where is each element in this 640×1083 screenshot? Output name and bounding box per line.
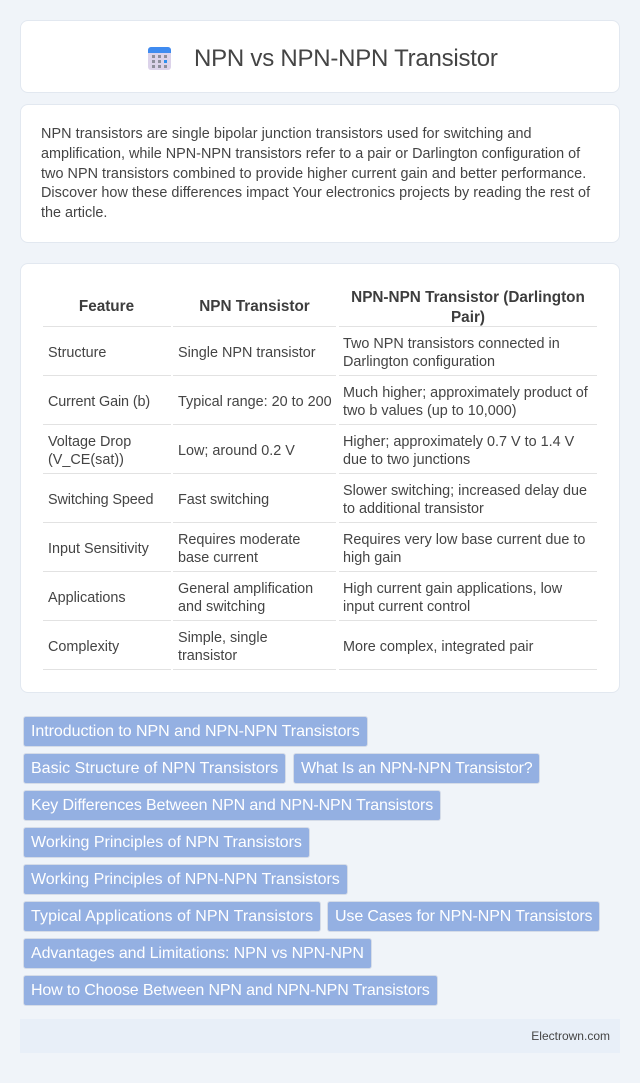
tag: introduction: Introduction to NPN and NPN-NPN Transistors	[31, 723, 360, 740]
text block: introduction: Discover how these differences impact Your electronics projects by reading the rest of	[41, 185, 590, 201]
row: current gain	[48, 385, 588, 419]
row: switching speed: Slower switching; increased delay due	[343, 483, 587, 499]
tag: how to choose	[23, 975, 438, 1006]
row: applications: and switching	[178, 599, 265, 615]
row: input sensitivity: Requires moderate	[178, 532, 300, 548]
text block: introduction: amplification, while NPN-NPN transistors refer to a pair or Darlington configuration of	[41, 146, 580, 162]
row: applications	[48, 581, 562, 615]
row: input sensitivity: Requires very low base current due to	[343, 532, 585, 548]
row: structure: Darlington configuration	[343, 354, 495, 370]
row: input sensitivity	[48, 532, 585, 566]
row: applications: Applications	[48, 590, 126, 606]
tag: key differences: Key Differences Between NPN and NPN-NPN Transistors	[31, 797, 433, 814]
row: structure: Two NPN transistors connected in	[343, 336, 560, 352]
title: NPN vs NPN-NPN Transistor	[194, 45, 498, 72]
row: applications: High current gain applications, low	[343, 581, 562, 597]
row: current gain: Current Gain (b)	[48, 394, 150, 410]
tag: use cases	[327, 901, 600, 932]
text block: introduction: NPN transistors are single bipolar junction transistors used for switching and	[41, 126, 532, 142]
tag: typical applications: Typical Applications of NPN Transistors	[31, 908, 313, 925]
row: switching speed: to additional transistor	[343, 501, 484, 517]
row: voltage drop: Voltage Drop	[48, 434, 131, 450]
tag: working principles NPN: Working Principles of NPN Transistors	[31, 834, 302, 851]
tag: typical applications	[23, 901, 321, 932]
table	[43, 289, 597, 670]
row: switching speed	[48, 483, 587, 517]
tag: advantages: Advantages and Limitations: NPN vs NPN-NPN	[31, 945, 364, 962]
row: current gain: Much higher; approximately product of	[343, 385, 588, 401]
tag: key differences	[23, 790, 441, 821]
row: input sensitivity: base current	[178, 550, 258, 566]
tag: working principles NPN-NPN	[23, 864, 348, 895]
row: structure: Single NPN transistor	[178, 345, 316, 361]
row: voltage drop: (V_CE(sat))	[48, 452, 124, 468]
panel: comparison table	[20, 263, 620, 693]
panel: introduction	[20, 104, 620, 243]
row: current gain: two b values (up to 10,000)	[343, 403, 517, 419]
row: voltage drop	[48, 434, 574, 468]
row: complexity	[48, 630, 534, 664]
row: input sensitivity: high gain	[343, 550, 401, 566]
icon: calendar	[148, 47, 171, 70]
row: structure	[48, 336, 560, 370]
tag: working principles NPN	[23, 827, 310, 858]
text block: introduction: two NPN transistors combined to provide higher current gain and better performance.	[41, 166, 586, 182]
row: complexity: More complex, integrated pair	[343, 639, 533, 655]
row: applications: input current control	[343, 599, 470, 615]
tag: basic structure: Basic Structure of NPN Transistors	[31, 760, 278, 777]
table header: NPN Transistor	[199, 298, 310, 315]
tag: how to choose: How to Choose Between NPN and NPN-NPN Transistors	[31, 982, 430, 999]
row: switching speed: Switching Speed	[48, 492, 153, 508]
tag: introduction	[23, 716, 368, 747]
table header: Feature	[79, 298, 134, 315]
row: voltage drop: due to two junctions	[343, 452, 470, 468]
footer	[20, 1019, 620, 1053]
footer credit: Electrown.com	[531, 1029, 610, 1043]
table header: NPN-NPN Transistor (Darlington	[351, 289, 585, 306]
row: switching speed: Fast switching	[178, 492, 269, 508]
tag: what is: What Is an NPN-NPN Transistor?	[301, 760, 532, 777]
text block: introduction	[41, 126, 590, 221]
panel: header	[20, 20, 620, 93]
tag: use cases: Use Cases for NPN-NPN Transistors	[335, 908, 592, 925]
row: input sensitivity: Input Sensitivity	[48, 541, 149, 557]
tag: what is	[293, 753, 540, 784]
table header	[79, 289, 585, 326]
tag: advantages	[23, 938, 372, 969]
tag: basic structure	[23, 753, 286, 784]
row: complexity: transistor	[178, 648, 237, 664]
row: complexity: Complexity	[48, 639, 119, 655]
row: structure: Structure	[48, 345, 106, 361]
table header: Pair)	[451, 309, 485, 326]
row: complexity: Simple, single	[178, 630, 268, 646]
tag: working principles NPN-NPN: Working Principles of NPN-NPN Transistors	[31, 871, 340, 888]
row: voltage drop: Higher; approximately 0.7 V to 1.4 V	[343, 434, 574, 450]
row: applications: General amplification	[178, 581, 313, 597]
text block: introduction: the article.	[41, 205, 107, 221]
row: current gain: Typical range: 20 to 200	[178, 394, 332, 410]
row: voltage drop: Low; around 0.2 V	[178, 443, 295, 459]
